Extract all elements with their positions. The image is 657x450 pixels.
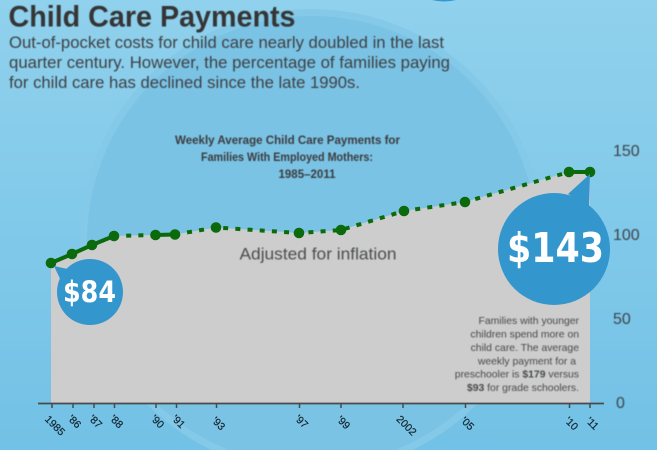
side note [455, 316, 580, 394]
x axis year labels: 2002 [394, 413, 419, 438]
x axis year labels: '88 [107, 413, 125, 431]
chart title [175, 133, 400, 181]
x axis year labels: '86 [65, 413, 83, 431]
side note: Families with younger [479, 316, 580, 327]
x axis year labels: 1985 [42, 413, 67, 438]
x axis year labels: '91 [169, 413, 187, 431]
intro text: quarter century. However, the percentage of families paying [9, 53, 450, 72]
area chart fill [51, 172, 590, 403]
top circle fragment [432, 0, 456, 2]
x axis year labels: '05 [458, 415, 476, 433]
intro text [9, 33, 450, 92]
chart title: Families With Employed Mothers: [201, 150, 373, 164]
x axis year labels: '11 [583, 415, 601, 433]
y axis labels: 100 [613, 227, 640, 244]
y axis labels: 150 [613, 143, 640, 160]
callout: $143: $143 [507, 224, 604, 272]
y axis labels: 0 [616, 395, 625, 412]
y axis labels: 50 [613, 311, 631, 328]
x axis year labels: '87 [86, 413, 104, 431]
y axis labels [613, 143, 640, 412]
data points [46, 167, 595, 268]
side note: preschooler is $179 versus [455, 370, 579, 380]
callout: $84: $84 [63, 275, 116, 309]
side note: children spend more on [470, 330, 579, 340]
title: Child Care Payments [8, 0, 296, 34]
inflation note: Adjusted for inflation [240, 244, 396, 264]
chart title: Weekly Average Child Care Payments for [175, 133, 400, 147]
x axis [38, 404, 604, 408]
x axis year labels [42, 413, 601, 438]
side note: child care. The average [471, 343, 579, 354]
x axis year labels: '97 [292, 413, 310, 431]
chart title: 1985–2011 [278, 167, 336, 181]
intro text: Out-of-pocket costs for child care nearly doubled in the last [9, 33, 444, 52]
x axis year labels: '99 [334, 414, 352, 432]
intro text: for child care has declined since the late 1990s. [9, 73, 360, 92]
x axis year labels: '90 [148, 413, 166, 431]
callout: $84 [54, 259, 123, 325]
x axis year labels: '93 [209, 415, 227, 433]
side note: $93 for grade schoolers. [467, 383, 579, 394]
callout: $143 [498, 174, 610, 305]
line series [51, 172, 590, 263]
side note: weekly payment for a [477, 356, 576, 368]
x axis year labels: '10 [562, 415, 580, 433]
background circle [80, 9, 544, 450]
